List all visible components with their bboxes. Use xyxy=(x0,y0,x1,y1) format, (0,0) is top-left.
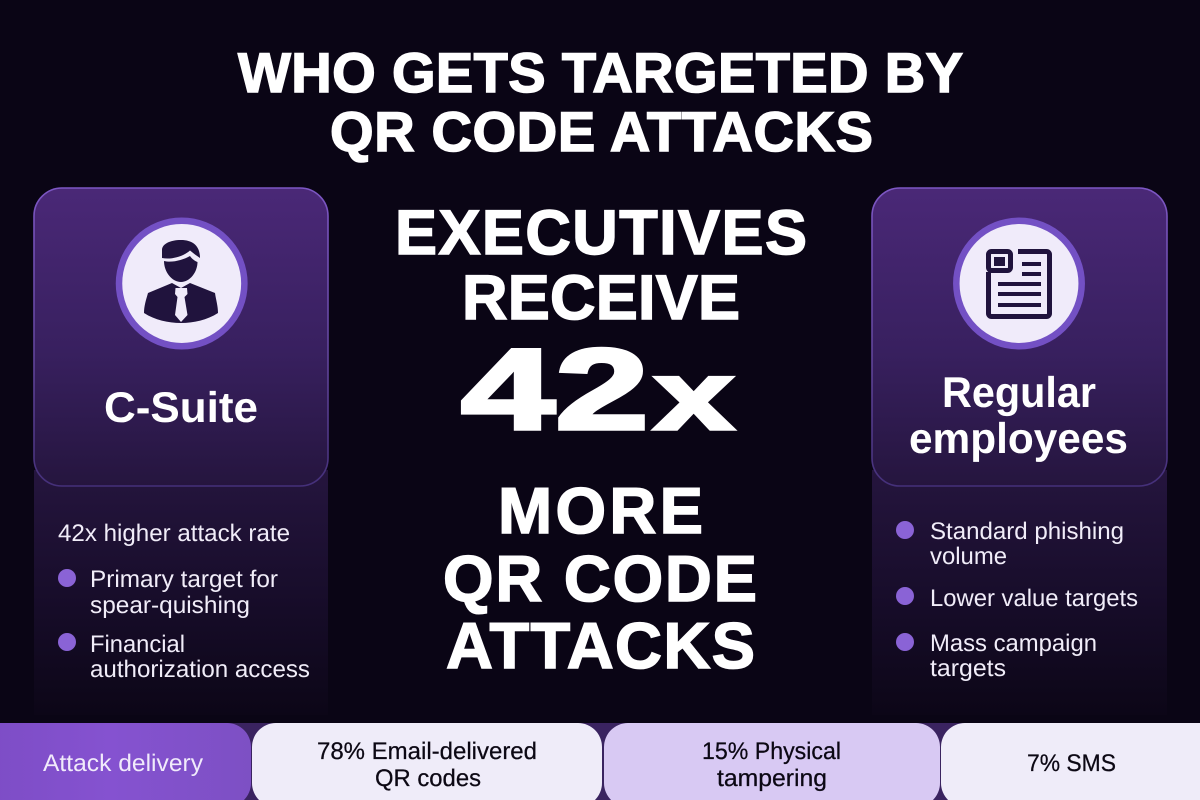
card: C-Suite xyxy=(34,188,328,486)
segment: email xyxy=(252,723,602,800)
central headline: RECEIVE xyxy=(462,263,740,333)
segment: email: QR codes xyxy=(375,765,481,792)
bullet: phishing volume: volume xyxy=(930,543,1007,570)
segment: label xyxy=(0,723,251,800)
heading: Regular employees: Regular xyxy=(942,369,1096,417)
bullet: phishing volume xyxy=(896,518,1124,570)
segment: physical: 15% Physical xyxy=(702,738,841,765)
central headline: QR CODE xyxy=(443,542,757,615)
bullet: mass campaign: Mass campaign xyxy=(930,630,1097,657)
title xyxy=(238,41,963,163)
icon: executive xyxy=(119,221,244,346)
central headline: EXECUTIVES xyxy=(395,198,807,268)
heading: Regular employees xyxy=(909,369,1128,463)
bullet: mass campaign xyxy=(896,630,1097,682)
central headline: ATTACKS xyxy=(446,609,755,682)
panel: Regular employees xyxy=(872,188,1167,715)
stat: attack rate: 42x higher attack rate xyxy=(58,520,290,547)
big number: 42x: 42x xyxy=(461,325,734,454)
card: Regular employees xyxy=(872,188,1167,486)
icon: document xyxy=(956,221,1082,346)
title: QR CODE ATTACKS xyxy=(330,100,873,163)
segment: label: Attack delivery xyxy=(43,750,203,777)
panel: C-Suite xyxy=(34,188,328,715)
central headline xyxy=(395,198,807,682)
bullet: financial access: authorization access xyxy=(90,656,310,683)
bullet: spear-quishing xyxy=(58,566,278,619)
bullet: financial access xyxy=(58,631,310,683)
title: WHO GETS TARGETED BY xyxy=(238,41,963,104)
bullet: spear-quishing: spear-quishing xyxy=(90,592,250,619)
bullet: mass campaign: targets xyxy=(930,655,1006,682)
heading: C-Suite: C-Suite xyxy=(104,384,258,432)
bullet: lower value: Lower value targets xyxy=(930,585,1138,612)
bullet: phishing volume: Standard phishing xyxy=(930,518,1124,545)
lower list background xyxy=(34,470,328,715)
segment: physical xyxy=(604,723,940,800)
segment: SMS: 7% SMS xyxy=(1027,750,1116,777)
bullet: financial access: Financial xyxy=(90,631,185,658)
bullet: spear-quishing: Primary target for xyxy=(90,566,278,593)
segment: SMS xyxy=(941,723,1200,800)
attack delivery bar xyxy=(0,723,1200,800)
segment: email: 78% Email-delivered xyxy=(317,738,537,765)
lower list background xyxy=(872,470,1167,715)
central headline: MORE xyxy=(498,474,703,547)
segment: physical: tampering xyxy=(717,765,827,792)
heading: Regular employees: employees xyxy=(909,415,1128,463)
